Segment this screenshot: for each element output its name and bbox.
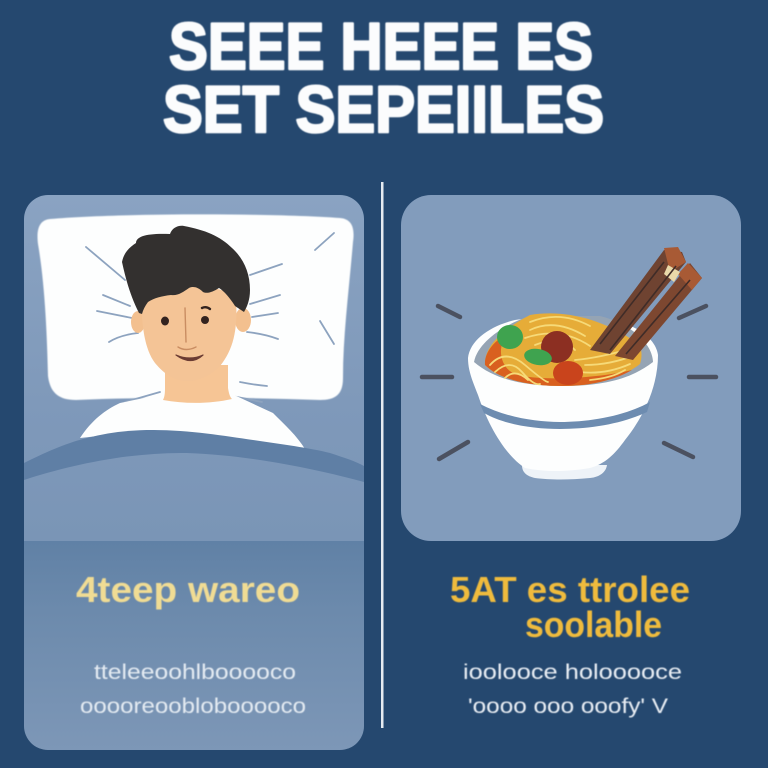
icon: pillow (38, 214, 354, 400)
caption: food: ioolooce holooooce (463, 661, 682, 684)
nose (178, 308, 196, 350)
heading: sleep: 4teep wareo (76, 569, 300, 610)
text block: food (450, 569, 690, 718)
blanket fold band (24, 430, 364, 482)
hair (122, 226, 250, 314)
heading: food: soolable (525, 604, 662, 645)
heading: food: 5AT es ttrolee (450, 569, 690, 610)
noodles (490, 317, 640, 384)
bowl body (468, 316, 658, 471)
mouth (176, 355, 203, 360)
panel: food (401, 195, 741, 541)
soup edge (485, 332, 632, 386)
neck (163, 365, 232, 403)
caption: food (463, 661, 682, 718)
title (163, 9, 604, 146)
text block: sleep (76, 569, 306, 718)
eyes (161, 316, 169, 326)
caption: sleep: tteleeoohlbooooco (94, 661, 296, 684)
panel background: sleep illustration (24, 195, 364, 541)
ears (131, 311, 145, 333)
eyebrow (202, 307, 210, 309)
panel background: sleep lower (24, 535, 364, 750)
panel background: food illustration (401, 195, 741, 541)
center divider (381, 182, 384, 728)
panel: sleep (24, 195, 364, 750)
shirt (80, 394, 305, 449)
chopsticks (590, 247, 702, 360)
caption: sleep (80, 661, 306, 718)
person (80, 226, 305, 449)
motion dashes (422, 306, 716, 459)
soup and noodles base (485, 313, 642, 386)
meatball (553, 361, 583, 385)
bowl inner (474, 316, 653, 386)
leaf (497, 325, 523, 349)
title: SEEE HEEE ES (169, 9, 593, 83)
meatball (541, 331, 573, 363)
face (142, 287, 236, 381)
caption: food: 'oooo ooo ooofy' V (468, 695, 668, 718)
bowl foot (522, 465, 607, 480)
leaf (523, 347, 553, 367)
pillow creases (86, 233, 334, 402)
heading: food (450, 569, 690, 645)
title: SET SEPEIILES (163, 72, 604, 146)
blanket (24, 430, 364, 482)
caption: sleep: ooooreooblobooooco (80, 695, 306, 718)
bowl band (480, 402, 650, 429)
icon: noodle bowl (468, 247, 702, 480)
